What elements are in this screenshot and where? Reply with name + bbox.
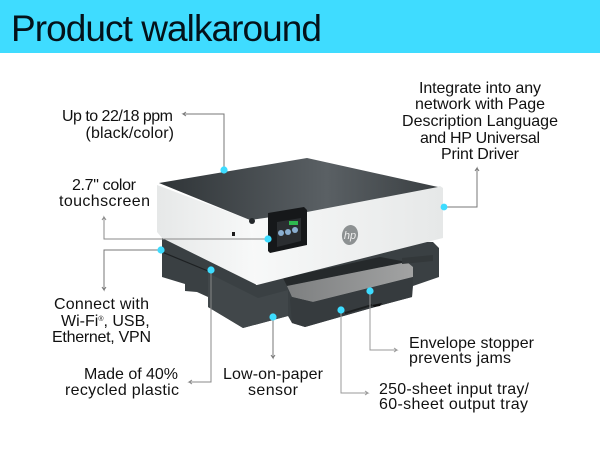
callout: paper sensor: Low-on-paper	[223, 366, 324, 383]
callout: print speed: Up to 22/18 ppm	[62, 108, 173, 125]
callout: recycled plastic	[65, 266, 215, 399]
callout: paper trays: 250-sheet input tray/	[379, 381, 530, 398]
HP logo	[340, 224, 360, 246]
title: Product walkaround	[11, 8, 322, 49]
side port	[232, 232, 235, 236]
callout: connectivity: Wi-Fi	[61, 313, 98, 330]
printer illustration	[157, 158, 443, 328]
callout: envelope stopper: prevents jams	[409, 350, 511, 367]
callout: network integration: Description Language	[402, 113, 558, 130]
callout: touchscreen: 2.7" color	[72, 177, 137, 194]
callout: connectivity: Ethernet, VPN	[52, 329, 151, 346]
callout: touchscreen: touchscreen	[59, 193, 150, 210]
callout: paper sensor	[223, 313, 324, 399]
header banner	[0, 0, 600, 53]
callout: connectivity	[52, 246, 165, 346]
callout: touchscreen	[59, 177, 272, 243]
callout: print speed: (black/color)	[86, 125, 174, 142]
callout: network integration	[402, 80, 558, 210]
callout: recycled plastic: Made of 40%	[84, 366, 178, 383]
callout: connectivity: ®	[98, 315, 104, 323]
callout: paper sensor: sensor	[248, 382, 299, 399]
callout: paper trays: 60-sheet output tray	[379, 396, 528, 413]
printer base	[162, 238, 439, 328]
output tray	[287, 262, 413, 302]
touchscreen display	[268, 207, 307, 253]
callout: network integration: Integrate into any	[419, 80, 541, 97]
callout: envelope stopper	[366, 287, 535, 367]
callout: connectivity: Connect with	[54, 296, 149, 313]
callout: network integration: Print Driver	[441, 146, 520, 163]
callout: connectivity: , USB,	[103, 313, 150, 330]
power button	[249, 218, 255, 224]
printer lid	[159, 158, 438, 220]
callout: print speed	[62, 108, 228, 174]
white body	[157, 185, 257, 285]
nameplate	[402, 255, 433, 264]
callout: network integration: and HP Universal	[420, 130, 540, 147]
callout: recycled plastic: recycled plastic	[65, 382, 179, 399]
callout: network integration: network with Page	[415, 96, 545, 113]
HP logo: hp	[344, 230, 356, 242]
callout: envelope stopper: Envelope stopper	[409, 335, 535, 352]
callout: paper trays	[337, 306, 530, 413]
